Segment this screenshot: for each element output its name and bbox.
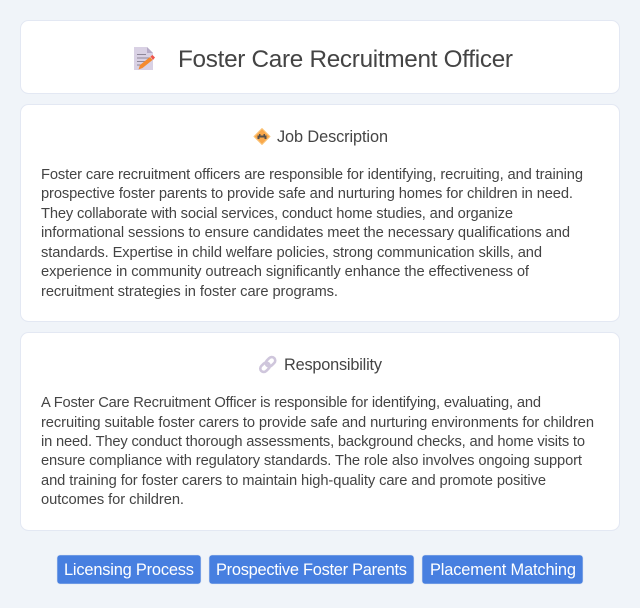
- text block: job description: [41, 167, 583, 300]
- title: Foster Care Recruitment Officer: [178, 46, 513, 73]
- text block: job description: experience in community outreach significantly enhance the effectiveness of: [41, 264, 530, 280]
- tag: licensing process: Licensing Process: [64, 561, 194, 579]
- text block: responsibility: recruiting suitable foster carers to provide safe and nurturing environments for children: [41, 415, 594, 431]
- panel: responsibility: [20, 332, 620, 530]
- tag: placement matching: [422, 555, 583, 584]
- icon: chain link: [259, 356, 277, 373]
- icon: document with pencil: [134, 47, 155, 70]
- text block: responsibility: outcomes for children.: [41, 492, 184, 508]
- tag: prospective foster parents: [209, 555, 414, 584]
- text block: responsibility: [41, 395, 594, 508]
- text block: responsibility: ensure compliance with regulatory standards. The role also involves ongoing support: [41, 453, 582, 469]
- panel: job description: [20, 104, 620, 322]
- panel: header: [20, 20, 620, 94]
- text block: job description: They collaborate with social services, conduct home studies, and organize: [41, 206, 513, 222]
- tag: prospective foster parents: Prospective Foster Parents: [216, 561, 407, 579]
- icon: diamond warning sign: [254, 128, 270, 144]
- text block: responsibility: in need. They conduct thorough assessments, background checks, and home visits to: [41, 434, 585, 450]
- text block: job description: prospective foster parents to provide safe and nurturing homes for children in need.: [41, 186, 573, 202]
- text block: job description: standards. Expertise in child welfare policies, strong communication skills, and: [41, 245, 542, 261]
- heading: job description: Job Description: [277, 128, 388, 146]
- text block: job description: recruitment strategies in foster care programs.: [41, 284, 338, 300]
- tag: licensing process: [57, 555, 201, 584]
- text block: responsibility: A Foster Care Recruitment Officer is responsible for identifying, evaluating, and: [41, 395, 541, 411]
- tag: placement matching: Placement Matching: [430, 561, 576, 579]
- text block: job description: informational sessions to ensure candidates meet the necessary qualifications and: [41, 225, 570, 241]
- text block: responsibility: and training for foster carers to maintain high-quality care and promote positive: [41, 473, 546, 489]
- text block: job description: Foster care recruitment officers are responsible for identifying, recruiting, and training: [41, 167, 583, 183]
- heading: responsibility: Responsibility: [284, 356, 383, 374]
